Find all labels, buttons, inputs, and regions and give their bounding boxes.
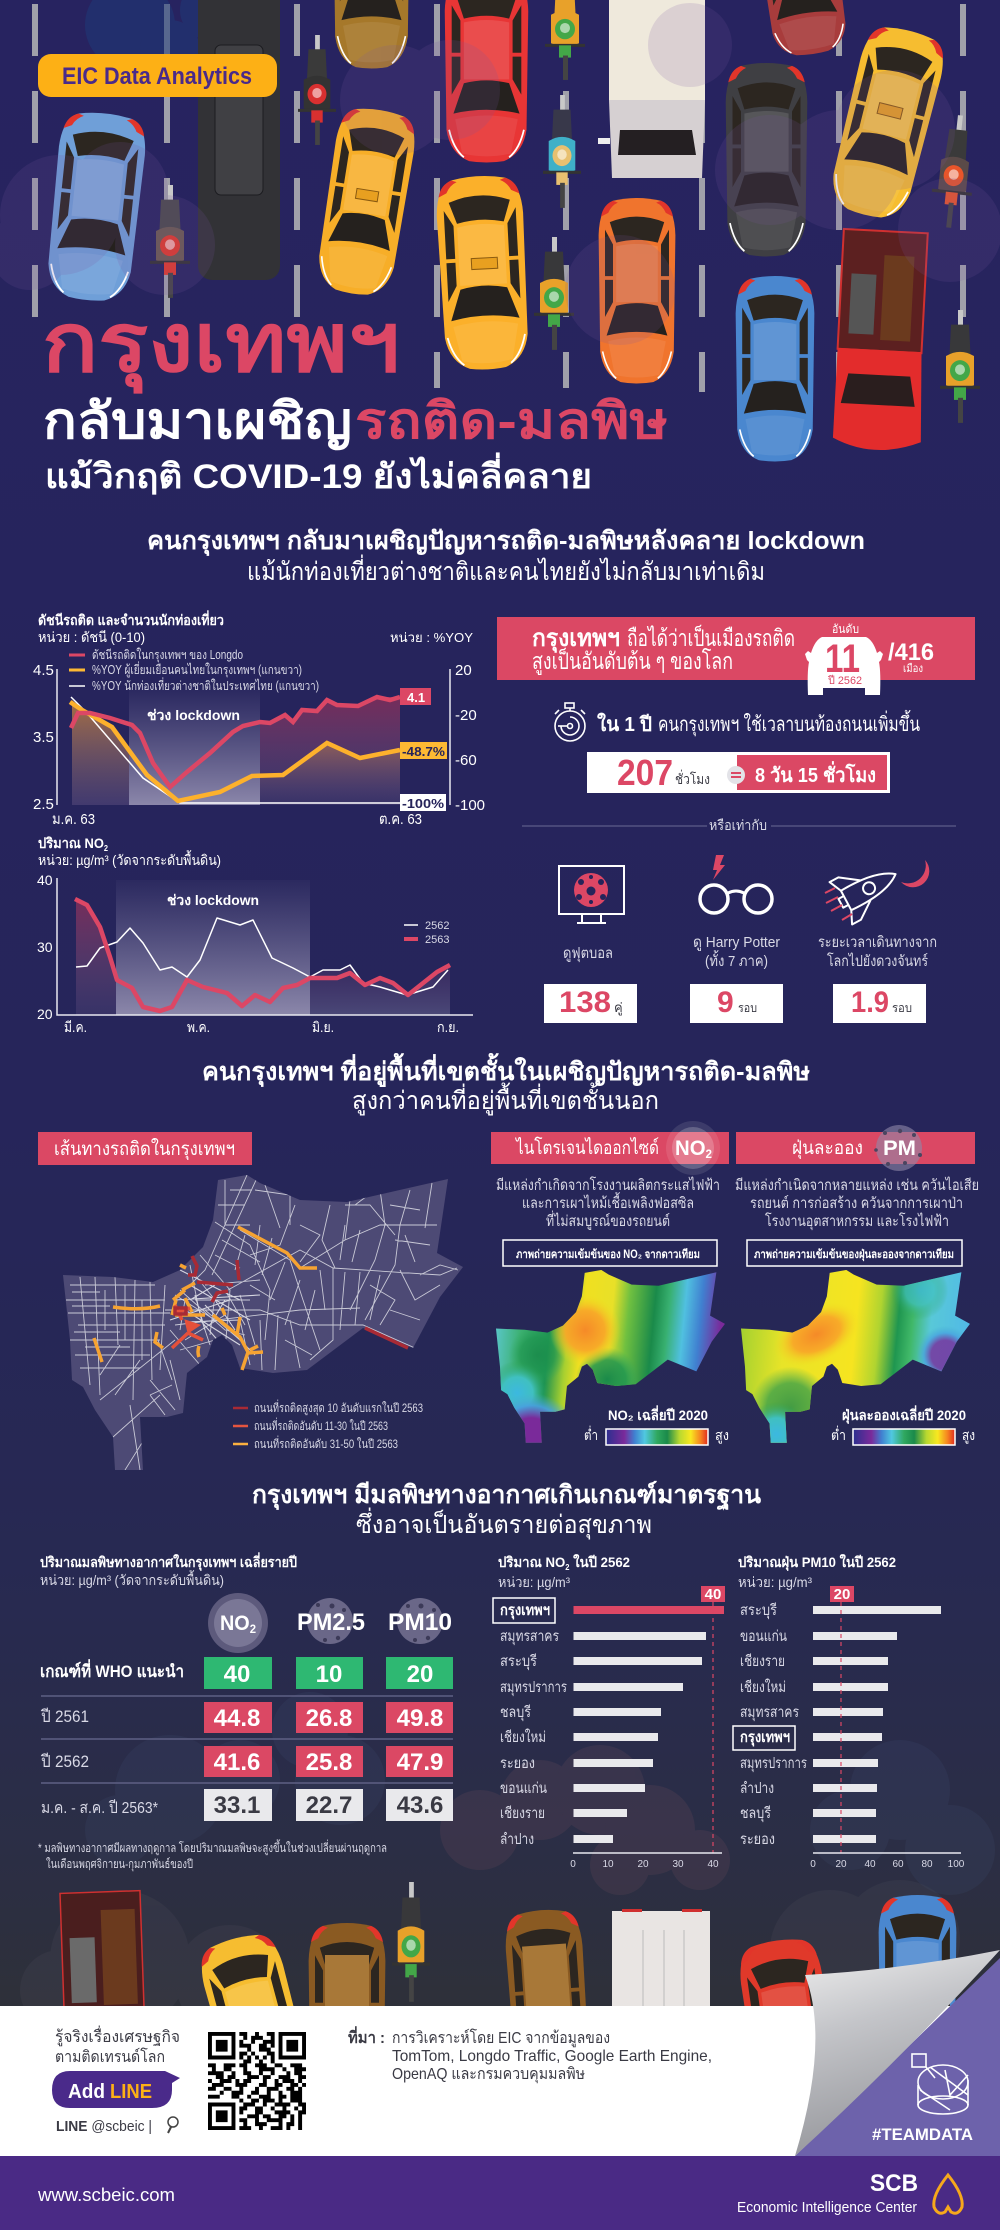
table cells: 40 bbox=[224, 1661, 250, 1688]
callout: time on road: ชั่วโมง bbox=[675, 770, 710, 787]
comparison: Harry Potter: รอบ bbox=[738, 1001, 757, 1015]
heading: section 3: ซึ่งอาจเป็นอันตรายต่อสุขภาพ bbox=[356, 1507, 652, 1540]
panel: NO2: มีแหล่งกำเกิดจากโรงงานผลิตกระแสไฟฟ้า bbox=[496, 1176, 720, 1194]
chart: NO2: ปริมาณ NO bbox=[38, 835, 109, 851]
panel: particulate matter bbox=[735, 1125, 979, 1466]
text: source bbox=[348, 2026, 712, 2084]
text: source: การวิเคราะห์โดย EIC จากข้อมูลของ bbox=[392, 2028, 610, 2048]
chart: traffic index and tourists: 2.5 bbox=[33, 796, 54, 813]
chart: NO2: 40 bbox=[37, 872, 53, 888]
map legend: ถนนที่รถติดสูงสุด 10 อันดับแรกในปี 2563 bbox=[254, 1399, 423, 1416]
text: follow line: รู้จริงเรื่องเศรษฐกิจ bbox=[55, 2025, 180, 2047]
icon: data cylinder bbox=[912, 2054, 968, 2114]
bar chart: NO2 by province: เชียงใหม่ bbox=[500, 1728, 546, 1746]
heading: section 1 bbox=[147, 527, 865, 586]
map legend: ถนนที่รถติดอันดับ 11-30 ในปี 2563 bbox=[254, 1417, 388, 1433]
icon: NO2 molecule: 2 bbox=[706, 1147, 712, 1161]
table cells: 47.9 bbox=[397, 1749, 443, 1776]
badge: EIC Data Analytics bbox=[38, 54, 277, 97]
badge: EIC Data Analytics: EIC Data Analytics bbox=[62, 63, 252, 90]
chart: traffic index and tourists: ม.ค. 63 bbox=[52, 811, 95, 828]
bar chart: PM10 by province bbox=[733, 1553, 965, 1870]
heading: section 2: คนกรุงเทพฯ ที่อยู่พื้นที่เขตชั้นในเผชิญปัญหารถติด-มลพิษ bbox=[202, 1052, 810, 1088]
chart: traffic index and tourists: -100 bbox=[455, 797, 485, 814]
chart: traffic index and tourists: ช่วง lockdown bbox=[147, 707, 240, 723]
panel: NO2: ไนโตรเจนไดออกไซด์ bbox=[514, 1136, 659, 1159]
chart: traffic index and tourists: %YOY ผู้เยี่ยมเยือนคนไทยในกรุงเทพฯ (แกนขวา) bbox=[92, 661, 302, 678]
chart: NO2: 2563 bbox=[425, 934, 449, 946]
panel: traffic routes map: เส้นทางรถติดในกรุงเทพฯ bbox=[54, 1138, 235, 1161]
panel: particulate matter: สูง bbox=[962, 1427, 975, 1444]
panel: particulate matter: โรงงานอุตสาหกรรม และโรงไฟฟ้า bbox=[765, 1212, 949, 1231]
bar chart: NO2 by province: ชลบุรี bbox=[500, 1704, 531, 1722]
comparison: football: ดูฟุตบอล bbox=[563, 945, 613, 963]
callout: time on road bbox=[555, 703, 920, 793]
bar chart: NO2 by province: 2 bbox=[565, 1563, 570, 1572]
icon: PM particle bbox=[874, 1125, 922, 1171]
chart: traffic index and tourists bbox=[33, 610, 485, 828]
divider label: or equal to: หรือเท่ากับ bbox=[709, 817, 767, 833]
button: Add LINE: LINE bbox=[110, 2081, 152, 2103]
comparison: moon trip: ระยะเวลาเดินทางจาก bbox=[818, 934, 937, 951]
traffic illustration: bottom bbox=[20, 1880, 960, 2134]
chart: traffic index and tourists: 4.5 bbox=[33, 662, 54, 679]
chart: NO2: มิ.ย. bbox=[312, 1019, 334, 1035]
bar chart: NO2 by province: สมุทรปราการ bbox=[500, 1679, 567, 1697]
table cells: 26.8 bbox=[306, 1705, 352, 1732]
chart: NO2: 2 bbox=[104, 844, 109, 853]
panel: congestion ranking: ปี 2562 bbox=[827, 674, 862, 687]
bar chart: NO2 by province: กรุงเทพฯ bbox=[500, 1602, 550, 1620]
bar chart: NO2 by province: 40 bbox=[705, 1586, 721, 1603]
bar chart: PM10 by province: ปริมาณฝุ่น PM10 ในปี 2562 bbox=[738, 1553, 896, 1571]
panel: annual pollution table: ปี 2561 bbox=[40, 1707, 89, 1726]
chart: traffic index and tourists: 20 bbox=[455, 662, 472, 679]
bar chart: NO2 by province: ลำปาง bbox=[500, 1831, 534, 1848]
text: LINE handle: LINE @scbeic | bbox=[56, 2118, 152, 2135]
text: source: OpenAQ และกรมควบคุมมลพิษ bbox=[392, 2066, 585, 2084]
panel: congestion ranking: /416 bbox=[888, 639, 934, 666]
bar chart: PM10 by province: 60 bbox=[892, 1859, 904, 1870]
panel: NO2: NO₂ เฉลี่ยปี 2020 bbox=[608, 1405, 708, 1423]
comparison: football: คู่ bbox=[614, 1000, 623, 1016]
chart: traffic index and tourists: %YOY นักท่องเที่ยวต่างชาติในประเทศไทย (แกนขวา) bbox=[92, 677, 319, 693]
bar chart: NO2 by province bbox=[493, 1553, 725, 1870]
panel: congestion ranking: เมือง bbox=[903, 662, 923, 675]
bar chart: PM10 by province: 40 bbox=[864, 1859, 876, 1870]
chart: traffic index and tourists: ต.ค. 63 bbox=[379, 811, 422, 828]
bar chart: PM10 by province: ลำปาง bbox=[740, 1780, 774, 1797]
chart: traffic index and tourists: หน่วย : %YOY bbox=[390, 630, 473, 645]
title: รถติด-มลพิษ bbox=[355, 393, 668, 449]
text: follow line bbox=[55, 2025, 180, 2066]
bar chart: PM10 by province: 0 bbox=[810, 1859, 816, 1870]
comparison: Harry Potter bbox=[690, 855, 783, 1023]
bar chart: NO2 by province: สระบุรี bbox=[500, 1653, 537, 1671]
chart: NO2: ก.ย. bbox=[437, 1019, 459, 1035]
comparison: football: 138 bbox=[559, 986, 611, 1019]
chart: NO2: 30 bbox=[37, 939, 53, 955]
map legend bbox=[233, 1399, 423, 1451]
text: source: ที่มา : bbox=[348, 2026, 385, 2047]
panel: annual pollution table: ปี 2562 bbox=[40, 1752, 89, 1771]
chart: traffic index and tourists: -48.7% bbox=[402, 744, 445, 759]
bar chart: PM10 by province: ชลบุรี bbox=[740, 1805, 771, 1823]
chart: traffic index and tourists: ดัชนีรถติดในกรุงเทพฯ ของ Longdo bbox=[92, 648, 243, 663]
footer band bbox=[0, 2156, 1000, 2230]
chart: NO2: 2562 bbox=[425, 920, 449, 932]
chart: NO2 bbox=[37, 835, 473, 1035]
bar chart: PM10 by province: หน่วย: µg/m³ bbox=[738, 1574, 812, 1590]
panel: congestion ranking: ถือได้ว่าเป็นเมืองรถติด bbox=[627, 623, 795, 651]
chart: traffic index and tourists: 4.1 bbox=[407, 690, 425, 705]
smoke clouds: lower section bbox=[85, 1692, 995, 1895]
column headers: 2 bbox=[250, 1622, 256, 1636]
congested roads bbox=[94, 1227, 408, 1370]
panel: traffic routes map bbox=[38, 1132, 463, 1470]
bar chart: NO2 by province: เชียงราย bbox=[500, 1805, 545, 1822]
comparison: Harry Potter: ดู Harry Potter bbox=[693, 934, 780, 951]
callout: time on road: คนกรุงเทพฯ ใช้เวลาบนท้องถนนเพิ่มขึ้น bbox=[658, 710, 920, 737]
callout: time on road: ใน 1 ปี bbox=[597, 712, 652, 736]
panel: NO2: และการเผาไหม้เชื้อเพลิงฟอสซิล bbox=[522, 1192, 694, 1212]
bar chart: PM10 by province: 100 bbox=[948, 1859, 965, 1870]
panel: particulate matter: ฝุ่นละออง bbox=[792, 1138, 863, 1160]
footer band: Economic Intelligence Center bbox=[737, 2199, 917, 2216]
bar chart: NO2 by province: ระยอง bbox=[500, 1755, 535, 1772]
bar chart: PM10 by province: 20 bbox=[834, 1586, 850, 1603]
chart: NO2: หน่วย: µg/m³ (วัดจากระดับพื้นดิน) bbox=[38, 850, 221, 868]
panel: congestion ranking: 11 bbox=[825, 637, 860, 681]
panel: NO2: สูง bbox=[715, 1427, 729, 1444]
bar chart: NO2 by province: ในปี 2562 bbox=[569, 1553, 630, 1570]
bar chart: PM10 by province: สมุทรปราการ bbox=[740, 1755, 807, 1773]
bar chart: NO2 by province: 10 bbox=[602, 1859, 614, 1870]
bar chart: NO2 by province: 30 bbox=[672, 1859, 684, 1870]
chart: NO2: มี.ค. bbox=[64, 1019, 87, 1035]
panel: NO2: ที่ไม่สมบูรณ์ของรถยนต์ bbox=[546, 1210, 670, 1230]
bar chart: PM10 by province: กรุงเทพฯ bbox=[740, 1729, 790, 1747]
comparison: Harry Potter: 9 bbox=[717, 986, 734, 1019]
page curl corner: #TEAMDATA bbox=[872, 2125, 973, 2144]
panel: annual pollution table: * มลพิษทางอากาศมีผลทางฤดูกาล โดยปริมาณมลพิษจะสูงขึ้นในช่วงเปลี่ยนผ่านฤดูกาล bbox=[38, 1839, 387, 1856]
panel: congestion ranking: อันดับ bbox=[832, 622, 859, 636]
table cells bbox=[204, 1657, 453, 1821]
map of Bangkok bbox=[63, 1175, 463, 1470]
bar chart: PM10 by province: ระยอง bbox=[740, 1831, 775, 1848]
bar chart: PM10 by province: เชียงราย bbox=[740, 1653, 785, 1670]
panel: annual pollution table: หน่วย: µg/m³ (วัดจากระดับพื้นดิน) bbox=[40, 1570, 224, 1588]
icon: car bbox=[805, 637, 883, 695]
QR code bbox=[208, 2032, 306, 2130]
icon: rocket and moon bbox=[825, 853, 929, 924]
icon: NO2 molecule bbox=[666, 1121, 720, 1175]
footer panel bbox=[0, 2006, 1000, 2156]
button: Add LINE: Add bbox=[68, 2081, 105, 2103]
title: กรุงเทพฯ bbox=[42, 298, 400, 394]
panel: congestion ranking: กรุงเทพฯ bbox=[532, 625, 620, 654]
title: กลับมาเผชิญ bbox=[43, 393, 352, 450]
panel: annual pollution table: ปริมาณมลพิษทางอากาศในกรุงเทพฯ เฉลี่ยรายปี bbox=[40, 1552, 297, 1571]
panel: congestion ranking bbox=[497, 617, 975, 695]
icon: PM particle: PM bbox=[883, 1137, 916, 1160]
title bbox=[42, 298, 668, 496]
chart: NO2: ช่วง lockdown bbox=[167, 892, 259, 908]
chart: traffic index and tourists: -60 bbox=[455, 752, 477, 769]
table cells: 33.1 bbox=[214, 1792, 260, 1819]
panel: particulate matter: ฝุ่นละอองเฉลี่ยปี 2020 bbox=[842, 1405, 966, 1424]
bar chart: NO2 by province: 20 bbox=[637, 1859, 649, 1870]
column headers: PM2.5 bbox=[297, 1609, 365, 1636]
bar chart: NO2 by province: ขอนแก่น bbox=[500, 1780, 547, 1797]
table cells: 43.6 bbox=[397, 1792, 443, 1819]
bar chart: NO2 by province: ปริมาณ NO bbox=[498, 1554, 569, 1570]
chart: traffic index and tourists: -100% bbox=[402, 796, 444, 811]
text: follow line: ตามติดเทรนด์โลก bbox=[55, 2047, 165, 2066]
bar chart: PM10 by province: 20 bbox=[835, 1859, 847, 1870]
comparison: moon trip: โลกไปยังดวงจันทร์ bbox=[827, 952, 928, 970]
bar chart: PM10 by province: 80 bbox=[921, 1859, 933, 1870]
title: แม้วิกฤติ COVID-19 ยังไม่คลี่คลาย bbox=[45, 452, 592, 496]
panel: NO2: ต่ำ bbox=[584, 1426, 598, 1443]
heading: section 3 bbox=[252, 1480, 761, 1540]
icon: stopwatch bbox=[555, 703, 585, 741]
page curl corner bbox=[795, 1950, 1000, 2156]
panel: annual pollution table: ม.ค. - ส.ค. ปี 2563* bbox=[41, 1799, 158, 1817]
comparison: football bbox=[544, 866, 637, 1023]
bar chart: PM10 by province: สระบุรี bbox=[740, 1602, 777, 1620]
heading: section 2: สูงกว่าคนที่อยู่พื้นที่เขตชั้นนอก bbox=[352, 1082, 659, 1116]
traffic illustration: header bbox=[0, 0, 1000, 462]
panel: annual pollution table bbox=[38, 1552, 453, 1872]
text: source: TomTom, Longdo Traffic, Google Earth Engine, bbox=[392, 2048, 712, 2065]
chart: traffic index and tourists: หน่วย : ดัชนี (0-10) bbox=[38, 629, 145, 645]
heading: section 1: แม้นักท่องเที่ยวต่างชาติและคนไทยยังไม่กลับมาเท่าเดิม bbox=[247, 554, 765, 586]
icon: SCB logo bbox=[934, 2175, 962, 2213]
footer band: SCB bbox=[870, 2170, 918, 2197]
comparison: moon trip bbox=[818, 853, 937, 1023]
icon: TV with football bbox=[559, 866, 624, 923]
button: Add LINE bbox=[52, 2071, 180, 2108]
panel: annual pollution table: เกณฑ์ที่ WHO แนะนำ bbox=[40, 1659, 184, 1681]
map legend: ถนนที่รถติดอันดับ 31-50 ในปี 2563 bbox=[254, 1435, 398, 1451]
heading: section 3: กรุงเทพฯ มีมลพิษทางอากาศเกินเกณฑ์มาตรฐาน bbox=[252, 1480, 761, 1511]
comparison: moon trip: 1.9 bbox=[851, 986, 889, 1019]
panel: NO2 bbox=[491, 1121, 729, 1446]
bar chart: NO2 by province: 0 bbox=[570, 1859, 576, 1870]
footer band: www.scbeic.com bbox=[37, 2185, 175, 2205]
panel: NO2: ภาพถ่ายความเข้มข้นของ NO₂ จากดาวเทียม bbox=[516, 1248, 700, 1261]
callout: time on road: 8 วัน 15 ชั่วโมง bbox=[755, 760, 876, 787]
chart: NO2: พ.ค. bbox=[187, 1019, 210, 1035]
panel: annual pollution table: ในเดือนพฤศจิกายน-กุมภาพันธ์ของปี bbox=[46, 1857, 193, 1872]
bar chart: PM10 by province: สมุทรสาคร bbox=[740, 1704, 799, 1722]
table cells: 49.8 bbox=[397, 1705, 443, 1732]
table cells: 20 bbox=[407, 1661, 433, 1688]
column headers: NO bbox=[220, 1612, 252, 1635]
bar chart: NO2 by province: สมุทรสาคร bbox=[500, 1628, 559, 1646]
panel: congestion ranking: สูงเป็นอันดับต้น ๆ ของโลก bbox=[532, 646, 733, 675]
bar chart: NO2 by province: หน่วย: µg/m³ bbox=[498, 1574, 570, 1590]
chart: traffic index and tourists: -20 bbox=[455, 707, 477, 724]
table cells: 22.7 bbox=[306, 1792, 352, 1819]
comparison: Harry Potter: (ทั้ง 7 ภาค) bbox=[705, 950, 768, 970]
bar chart: NO2 by province: 40 bbox=[707, 1859, 719, 1870]
heading: section 2 bbox=[202, 1052, 810, 1116]
panel: particulate matter: ภาพถ่ายความเข้มข้นของฝุ่นละอองจากดาวเทียม bbox=[754, 1248, 954, 1262]
table cells: 25.8 bbox=[306, 1749, 352, 1776]
table cells: 41.6 bbox=[214, 1749, 260, 1776]
callout: time on road: 207 bbox=[617, 752, 673, 793]
column headers: PM10 bbox=[388, 1609, 452, 1636]
panel: particulate matter: ต่ำ bbox=[831, 1426, 846, 1443]
chart: traffic index and tourists: 3.5 bbox=[33, 729, 54, 746]
heading: section 1: คนกรุงเทพฯ กลับมาเผชิญปัญหารถติด-มลพิษหลังคลาย lockdown bbox=[147, 527, 865, 557]
chart: traffic index and tourists: ดัชนีรถติด และจำนวนนักท่องเที่ยว bbox=[38, 610, 224, 628]
icon: glasses and lightning bbox=[700, 855, 772, 913]
comparison: moon trip: รอบ bbox=[892, 1001, 912, 1015]
table cells: 10 bbox=[316, 1661, 342, 1688]
heat map: NO2 bbox=[496, 1270, 725, 1443]
column headers bbox=[208, 1593, 452, 1653]
bar chart: PM10 by province: ขอนแก่น bbox=[740, 1628, 787, 1645]
table cells: 44.8 bbox=[214, 1705, 260, 1732]
chart: NO2: 20 bbox=[37, 1006, 53, 1022]
bar chart: PM10 by province: เชียงใหม่ bbox=[740, 1678, 786, 1696]
icon: NO2 molecule: NO bbox=[675, 1137, 706, 1160]
heat map: PM bbox=[741, 1270, 970, 1443]
panel: particulate matter: รถยนต์ การก่อสร้าง ควันจากการเผาป่า bbox=[750, 1195, 963, 1212]
